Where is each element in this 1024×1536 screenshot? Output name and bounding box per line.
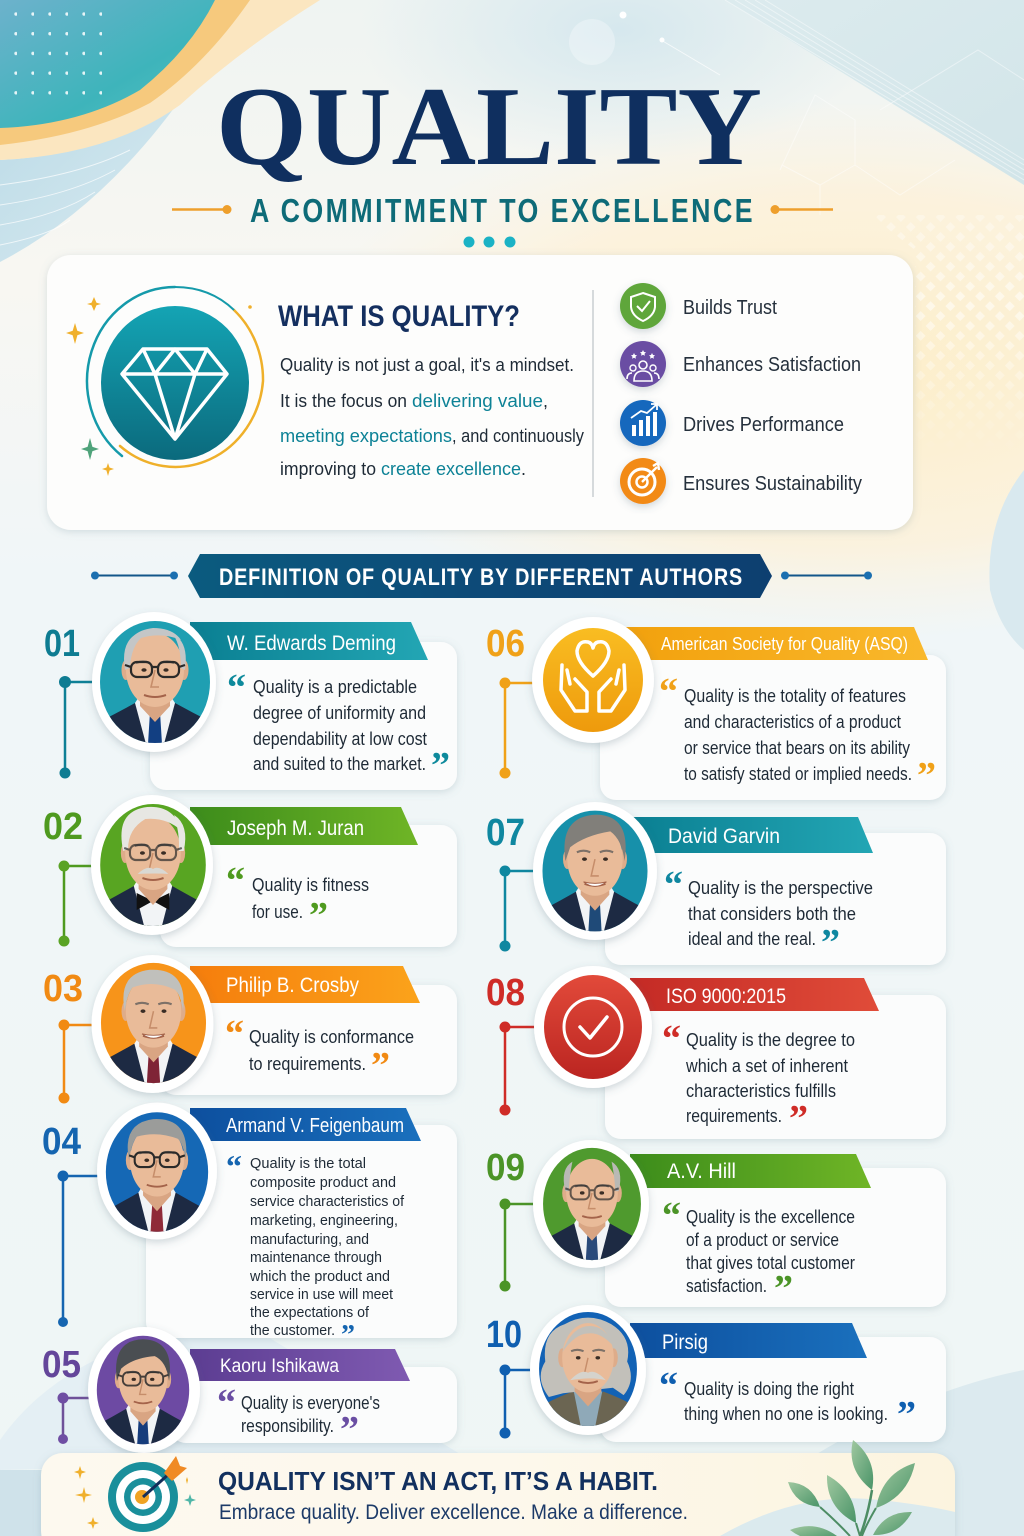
label: builds trust: Builds Trust — [683, 297, 777, 319]
author 01: Deming: degree of uniformity and — [253, 703, 426, 723]
author 09: Hill: A.V. Hill — [667, 1160, 736, 1183]
author 06: ASQ: American Society for Quality (ASQ) — [661, 634, 908, 654]
author 05: Ishikawa: ” — [340, 1409, 359, 1451]
icon: builds trust — [620, 283, 666, 329]
author 07: Garvin: David Garvin — [668, 825, 780, 848]
dot grid — [8, 4, 108, 100]
author 07: Garvin: 07 — [486, 812, 525, 854]
author 08: ISO: ” — [789, 1098, 808, 1140]
author 06: ASQ: 06 — [486, 623, 525, 665]
author 05: Ishikawa: Kaoru Ishikawa — [220, 1356, 339, 1377]
author 03: Crosby: Quality is conformance — [249, 1027, 414, 1047]
author 04: Feigenbaum: composite product and — [250, 1174, 396, 1191]
author 01: Deming: 01 — [44, 623, 80, 665]
footer panel — [41, 1440, 955, 1536]
author 03: Crosby: “ — [225, 1013, 244, 1055]
author 04: Feigenbaum: Armand V. Feigenbaum — [226, 1115, 404, 1137]
left blue wedge — [0, 100, 180, 262]
author 01: Deming: W. Edwards Deming — [227, 632, 396, 655]
icon: drives performance — [620, 400, 666, 446]
author 02: Juran: 02 — [43, 806, 83, 848]
author 09: Hill: of a product or service — [686, 1230, 839, 1250]
author 04: Feigenbaum: the customer. — [250, 1322, 335, 1339]
author 02: Juran: ” — [309, 895, 328, 937]
text block: definition: improving to — [280, 459, 376, 479]
footer headline: QUALITY ISN’T AN ACT, IT’S A HABIT. — [218, 1466, 658, 1496]
icon: ensures sustainability — [620, 458, 666, 504]
top-left gold wave — [0, 0, 320, 160]
author 01: Deming: and suited to the market. — [253, 754, 426, 774]
author 10: Pirsig: Pirsig — [662, 1331, 708, 1354]
author 03: Crosby: Philip B. Crosby — [226, 974, 359, 997]
author 09: Hill: that gives total customer — [686, 1253, 855, 1273]
author 06: ASQ — [486, 617, 946, 800]
author 09: Hill: “ — [662, 1195, 681, 1237]
author 02: Juran — [43, 795, 457, 947]
author 04: Feigenbaum — [42, 1102, 457, 1351]
text block: definition: create excellence — [381, 459, 521, 479]
author 01: Deming: Quality is a predictable — [253, 677, 417, 697]
author 10: Pirsig: ” — [897, 1394, 916, 1436]
author 10: Pirsig: Quality is doing the right — [684, 1379, 854, 1399]
author 04: Feigenbaum: which the product and — [249, 1268, 390, 1285]
text block: definition: , and continuously — [452, 426, 584, 446]
author 04: Feigenbaum: manufacturing, and — [250, 1231, 369, 1248]
author 09: Hill: 09 — [486, 1147, 525, 1189]
author 08: ISO: 08 — [486, 972, 525, 1014]
author 09: Hill: Quality is the excellence — [686, 1207, 855, 1227]
author 08: ISO: Quality is the degree to — [686, 1030, 855, 1050]
author 05: Ishikawa: Quality is everyone's — [241, 1393, 380, 1413]
title: QUALITY — [216, 65, 762, 189]
icon: check circle — [564, 998, 622, 1056]
author 02: Juran: Quality is fitness — [252, 875, 369, 895]
author 04: Feigenbaum: service in use will meet — [250, 1286, 394, 1303]
text block: definition: delivering value — [412, 391, 543, 411]
heading: what is quality: WHAT IS QUALITY? — [278, 300, 520, 333]
label: drives performance: Drives Performance — [683, 414, 844, 436]
author 10: Pirsig: “ — [659, 1365, 678, 1407]
author 01: Deming: “ — [227, 667, 246, 709]
author 02: Juran: “ — [226, 860, 245, 902]
author 04: Feigenbaum: 04 — [42, 1121, 81, 1163]
author 02: Juran: for use. — [252, 902, 303, 922]
author 10: Pirsig — [486, 1305, 946, 1442]
author 01: Deming: ” — [431, 745, 450, 787]
author 07: Garvin: ” — [821, 922, 840, 964]
text block: definition: . — [521, 459, 526, 479]
panel: what is quality — [47, 255, 913, 530]
footer subline: Embrace quality. Deliver excellence. Make a difference. — [219, 1501, 688, 1524]
author 07: Garvin: that considers both the — [688, 904, 856, 924]
author 06: ASQ: or service that bears on its ability — [684, 738, 910, 758]
author 08: ISO — [486, 966, 946, 1140]
text block: definition: It is the focus on — [280, 391, 407, 411]
author 04: Feigenbaum: maintenance through — [250, 1249, 382, 1266]
icon: enhances satisfaction — [620, 341, 666, 387]
author 05: Ishikawa: responsibility. — [241, 1416, 334, 1436]
author 07: Garvin: Quality is the perspective — [688, 878, 873, 898]
author 02: Juran: Joseph M. Juran — [227, 817, 364, 840]
author 06: ASQ: and characteristics of a product — [684, 712, 901, 732]
author 01: Deming — [44, 612, 457, 790]
section banner: DEFINITION OF QUALITY BY DIFFERENT AUTHORS — [219, 564, 743, 591]
author 04: Feigenbaum: service characteristics of — [250, 1193, 405, 1210]
author 09: Hill: satisfaction. — [686, 1276, 767, 1296]
author 06: ASQ: to satisfy stated or implied needs. — [684, 764, 912, 784]
author 03: Crosby: 03 — [43, 968, 83, 1010]
section banner — [91, 554, 872, 598]
icon: target with arrow — [74, 1456, 196, 1532]
author 08: ISO: ISO 9000:2015 — [666, 985, 786, 1008]
text block: definition: Quality is not just a goal, it's a mindset. — [280, 355, 574, 375]
author 03: Crosby — [43, 955, 457, 1104]
author 04: Feigenbaum: Quality is the total — [250, 1155, 366, 1172]
icon: hands holding heart — [561, 642, 625, 711]
author 09: Hill: ” — [774, 1268, 793, 1310]
author 04: Feigenbaum: ” — [341, 1320, 355, 1351]
author 08: ISO: characteristics fulfills — [686, 1081, 836, 1101]
label: enhances satisfaction: Enhances Satisfaction — [683, 354, 861, 376]
author 08: ISO: which a set of inherent — [685, 1056, 848, 1076]
label: ensures sustainability: Ensures Sustainability — [683, 473, 862, 495]
text block: definition: meeting expectations — [280, 426, 452, 446]
author 07: Garvin — [486, 802, 946, 965]
author 06: ASQ: Quality is the totality of features — [684, 686, 906, 706]
author 10: Pirsig: thing when no one is looking. — [684, 1404, 888, 1424]
top-left teal blob — [0, 0, 215, 128]
author 09: Hill — [486, 1140, 946, 1310]
text block: definition: , — [543, 391, 548, 411]
author 08: ISO: requirements. — [686, 1106, 782, 1126]
author 06: ASQ: ” — [917, 755, 936, 797]
subtitle: A COMMITMENT TO EXCELLENCE — [250, 192, 755, 229]
author 06: ASQ: “ — [659, 671, 678, 713]
author 04: Feigenbaum: marketing, engineering, — [250, 1212, 398, 1229]
icon: diamond badge — [66, 287, 263, 476]
subtitle — [172, 192, 833, 248]
author 07: Garvin: ideal and the real. — [688, 929, 816, 949]
author 05: Ishikawa — [42, 1327, 457, 1453]
plant — [788, 1440, 915, 1536]
author 10: Pirsig: 10 — [486, 1314, 522, 1356]
author 07: Garvin: “ — [664, 864, 683, 906]
author 05: Ishikawa: “ — [217, 1382, 236, 1424]
author 08: ISO: “ — [662, 1018, 681, 1060]
author 03: Crosby: ” — [371, 1045, 390, 1087]
author 03: Crosby: to requirements. — [249, 1054, 366, 1074]
author 04: Feigenbaum: “ — [226, 1148, 242, 1184]
author 05: Ishikawa: 05 — [42, 1344, 81, 1386]
author 04: Feigenbaum: the expectations of — [250, 1304, 370, 1321]
author 01: Deming: dependability at low cost — [253, 729, 427, 749]
